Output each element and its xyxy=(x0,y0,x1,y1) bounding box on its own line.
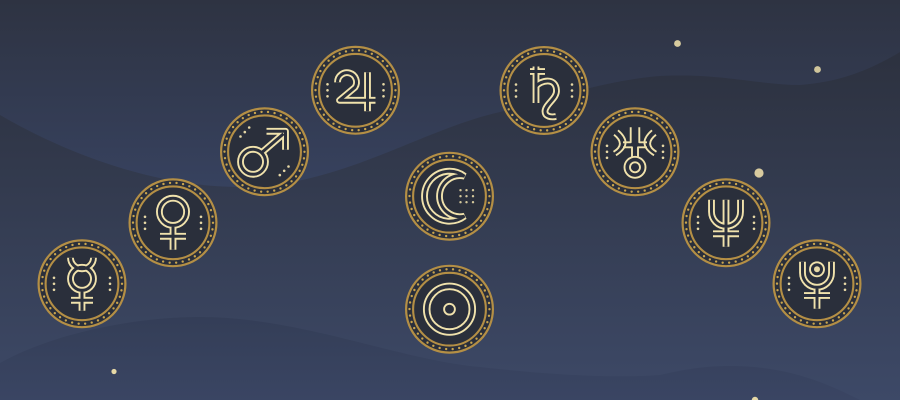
coin: Jupiter xyxy=(312,47,399,134)
coin: Venus xyxy=(130,179,216,266)
coin: Mars xyxy=(221,108,308,195)
coin: Uranus xyxy=(592,108,678,195)
diagonal dots xyxy=(239,126,290,176)
stars xyxy=(111,40,821,400)
side dots xyxy=(144,216,202,230)
icon: Neptune symbol xyxy=(712,200,740,247)
side dots xyxy=(697,216,755,230)
side dots xyxy=(788,276,846,291)
icon: Jupiter symbol xyxy=(337,72,376,111)
icon: Mars symbol xyxy=(240,131,286,174)
icon: Saturn symbol xyxy=(530,66,557,117)
icon: Pluto symbol xyxy=(802,262,832,309)
side dots xyxy=(53,276,111,291)
icon: Uranus symbol xyxy=(614,127,656,178)
side dots xyxy=(515,83,573,98)
side dots xyxy=(326,83,385,98)
coin: Neptune xyxy=(683,179,769,266)
bottom wave xyxy=(0,317,860,400)
coin: Moon xyxy=(406,153,493,240)
coin: Saturn xyxy=(501,47,587,134)
icon: crescent moon xyxy=(424,171,464,221)
coin: Sun xyxy=(406,266,493,353)
icon: Venus symbol xyxy=(159,198,187,250)
coin: Mercury xyxy=(39,240,125,327)
dot grid xyxy=(459,189,474,203)
side dots xyxy=(606,144,664,159)
icon: Sun symbol xyxy=(424,284,475,335)
icon: Mercury symbol xyxy=(70,258,94,311)
coin: Pluto xyxy=(774,240,860,327)
